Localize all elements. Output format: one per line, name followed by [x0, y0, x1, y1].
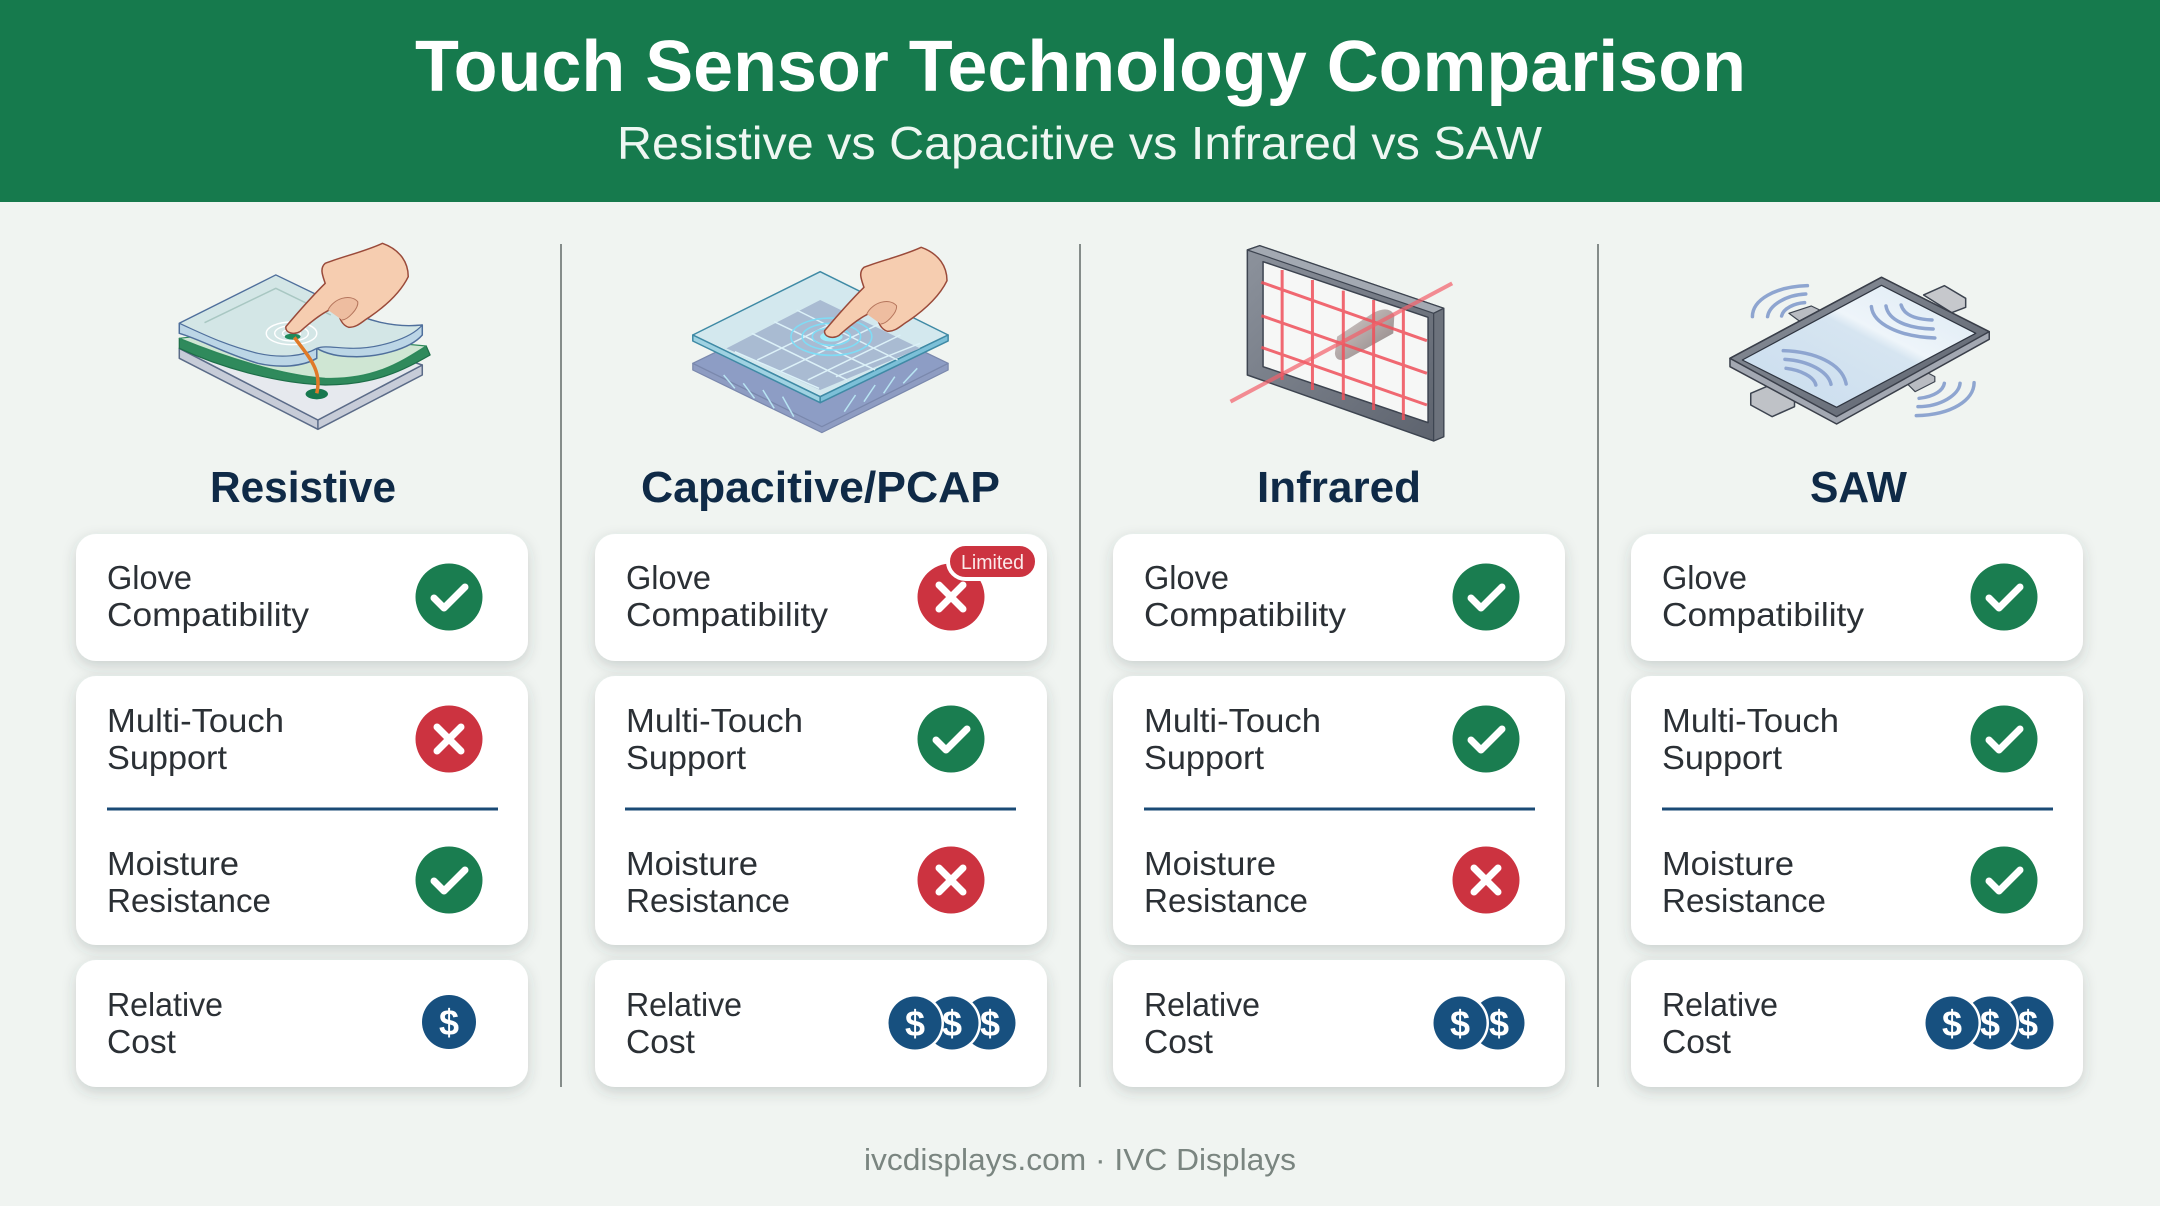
- card: multi-touch and moisture: Multi-Touch: [107, 702, 284, 739]
- panel: Infrared: [1113, 246, 1565, 1087]
- card: multi-touch and moisture: Multi-Touch: [1662, 702, 1839, 739]
- card: relative cost: Relative: [107, 986, 223, 1023]
- card: glove compatibility: Glove: [1662, 559, 1747, 596]
- badge: limited: Limited: [961, 552, 1024, 574]
- title: Touch Sensor Technology Comparison: [415, 27, 1746, 107]
- card: multi-touch and moisture: Multi-Touch: [626, 702, 803, 739]
- icon: infrared frame with light grid: [1231, 246, 1452, 441]
- card: multi-touch and moisture: Resistance: [626, 882, 790, 919]
- card: relative cost: [1631, 960, 2083, 1087]
- footer credit: ivcdisplays.com · IVC Displays: [864, 1142, 1296, 1177]
- card: relative cost: Cost: [1662, 1023, 1731, 1060]
- card: multi-touch and moisture: Moisture: [107, 845, 239, 882]
- card: relative cost: Relative: [626, 986, 742, 1023]
- card: glove compatibility: [1631, 534, 2083, 661]
- heading: Infrared: Infrared: [1257, 463, 1421, 512]
- header band: [0, 0, 2160, 202]
- card: multi-touch and moisture: Support: [107, 739, 227, 776]
- card: relative cost: $: [1489, 1003, 1509, 1044]
- panel: Capacitive/PCAP: [595, 247, 1047, 1087]
- card: multi-touch and moisture: Resistance: [1144, 882, 1308, 919]
- badge: limited: [948, 544, 1037, 579]
- card: multi-touch and moisture: Support: [1144, 739, 1264, 776]
- card: glove compatibility: [76, 534, 528, 661]
- subtitle: Resistive vs Capacitive vs Infrared vs SAW: [617, 117, 1543, 169]
- card: multi-touch and moisture: Support: [1662, 739, 1782, 776]
- card: multi-touch and moisture: [595, 676, 1047, 945]
- panel: Resistive: [76, 243, 528, 1087]
- card: multi-touch and moisture: Moisture: [1144, 845, 1276, 882]
- card: multi-touch and moisture: [1631, 676, 2083, 945]
- panel: SAW: [1631, 277, 2083, 1087]
- card: glove compatibility: Compatibility: [1144, 596, 1347, 633]
- card: relative cost: Cost: [626, 1023, 695, 1060]
- card: relative cost: $: [439, 1002, 459, 1043]
- heading: Resistive: Resistive: [210, 463, 396, 512]
- heading: Capacitive/PCAP: Capacitive/PCAP: [641, 463, 1000, 512]
- card: multi-touch and moisture: Resistance: [1662, 882, 1826, 919]
- card: relative cost: $: [1942, 1003, 1962, 1044]
- card: glove compatibility: Glove: [626, 559, 711, 596]
- card: relative cost: Cost: [1144, 1023, 1213, 1060]
- card: glove compatibility: [595, 534, 1047, 661]
- card: multi-touch and moisture: Support: [626, 739, 746, 776]
- card: relative cost: $: [2018, 1003, 2038, 1044]
- icon: SAW panel with transducers and waves: [1730, 277, 1989, 424]
- card: glove compatibility: [1113, 534, 1565, 661]
- card: relative cost: $: [942, 1003, 962, 1044]
- card: relative cost: Relative: [1662, 986, 1778, 1023]
- card: relative cost: $: [980, 1003, 1000, 1044]
- card: multi-touch and moisture: [76, 676, 528, 945]
- card: glove compatibility: Glove: [107, 559, 192, 596]
- card: glove compatibility: Compatibility: [626, 596, 829, 633]
- card: multi-touch and moisture: Multi-Touch: [1144, 702, 1321, 739]
- card: relative cost: $: [1980, 1003, 2000, 1044]
- card: relative cost: Cost: [107, 1023, 176, 1060]
- card: glove compatibility: Glove: [1144, 559, 1229, 596]
- card: multi-touch and moisture: [1113, 676, 1565, 945]
- card: relative cost: Relative: [1144, 986, 1260, 1023]
- icon: resistive layered panel with finger: [179, 243, 430, 429]
- card: multi-touch and moisture: Moisture: [1662, 845, 1794, 882]
- card: multi-touch and moisture: Moisture: [626, 845, 758, 882]
- card: relative cost: [76, 960, 528, 1087]
- card: multi-touch and moisture: Resistance: [107, 882, 271, 919]
- card: relative cost: [595, 960, 1047, 1087]
- icon: capacitive glass and sensor grid with finger: [693, 247, 948, 433]
- card: relative cost: $: [1450, 1003, 1470, 1044]
- card: relative cost: $: [905, 1003, 925, 1044]
- card: glove compatibility: Compatibility: [1662, 596, 1865, 633]
- heading: SAW: SAW: [1810, 463, 1907, 512]
- card: relative cost: [1113, 960, 1565, 1087]
- card: glove compatibility: Compatibility: [107, 596, 310, 633]
